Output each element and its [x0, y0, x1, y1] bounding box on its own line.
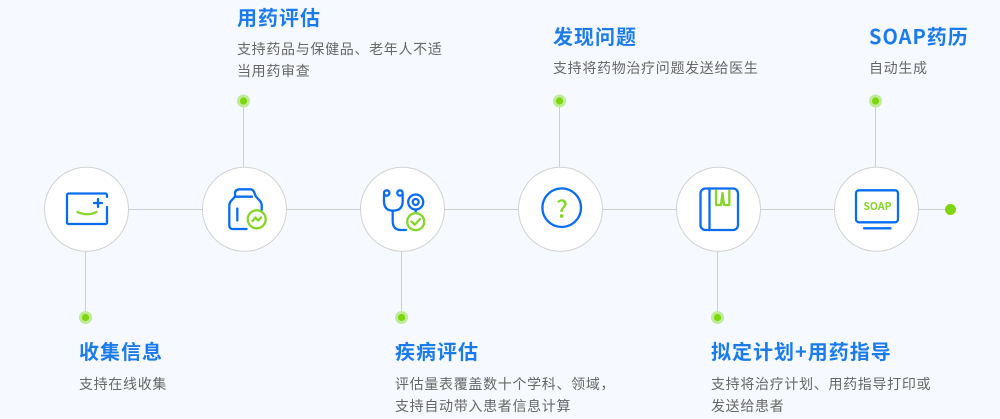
- text block: disease assessment: 支持自动带入患者信息计算: [395, 396, 571, 416]
- text block: collect information: 收集信息: [79, 336, 163, 365]
- text block: collect information: [79, 336, 167, 394]
- text block: plan and guidance: 拟定计划+用药指导: [711, 336, 892, 365]
- node: find problems: [518, 167, 602, 251]
- text block: medication assessment: 用药评估: [237, 2, 321, 31]
- text block: find problems: [553, 21, 759, 78]
- icon: card with plus and smile: [67, 194, 107, 224]
- text block: medication assessment: 支持药品与保健品、老年人不适: [237, 39, 443, 59]
- text block: SOAP record: SOAP药历: [869, 21, 969, 50]
- text block: SOAP record: 自动生成: [869, 58, 928, 78]
- text block: SOAP record: [869, 21, 969, 78]
- node: SOAP record: [834, 167, 918, 251]
- node: medication assessment: [202, 167, 286, 251]
- text block: medication assessment: [237, 2, 443, 81]
- icon: SOAP monitor: SOAP: [863, 199, 892, 214]
- node: collect information: [44, 167, 128, 251]
- marker: SOAP record: [869, 94, 882, 108]
- node: disease assessment: [360, 167, 444, 251]
- text block: find problems: 支持将药物治疗问题发送给医生: [553, 58, 759, 78]
- marker: disease assessment: [395, 311, 408, 324]
- icon: question mark: ?: [556, 190, 568, 224]
- text block: plan and guidance: 支持将治疗计划、用药指导打印或: [711, 374, 931, 394]
- icon: medicine bottle: [229, 189, 266, 229]
- text block: find problems: 发现问题: [553, 21, 637, 50]
- text block: disease assessment: [395, 336, 615, 416]
- marker: plan and guidance: [711, 311, 724, 324]
- text block: medication assessment: 当用药审查: [237, 61, 310, 81]
- marker: find problems: [553, 94, 566, 108]
- text block: plan and guidance: [711, 336, 931, 416]
- icon: stethoscope: [384, 190, 424, 230]
- node: plan and guidance: [676, 167, 760, 251]
- marker: medication assessment: [237, 94, 250, 108]
- marker: collect information: [79, 311, 92, 324]
- icon: book with bookmark: [700, 188, 738, 230]
- end dot: [945, 204, 956, 215]
- text block: disease assessment: 疾病评估: [395, 336, 479, 365]
- text block: collect information: 支持在线收集: [79, 374, 167, 394]
- text block: plan and guidance: 发送给患者: [711, 396, 784, 416]
- text block: disease assessment: 评估量表覆盖数十个学科、领域，: [395, 374, 615, 394]
